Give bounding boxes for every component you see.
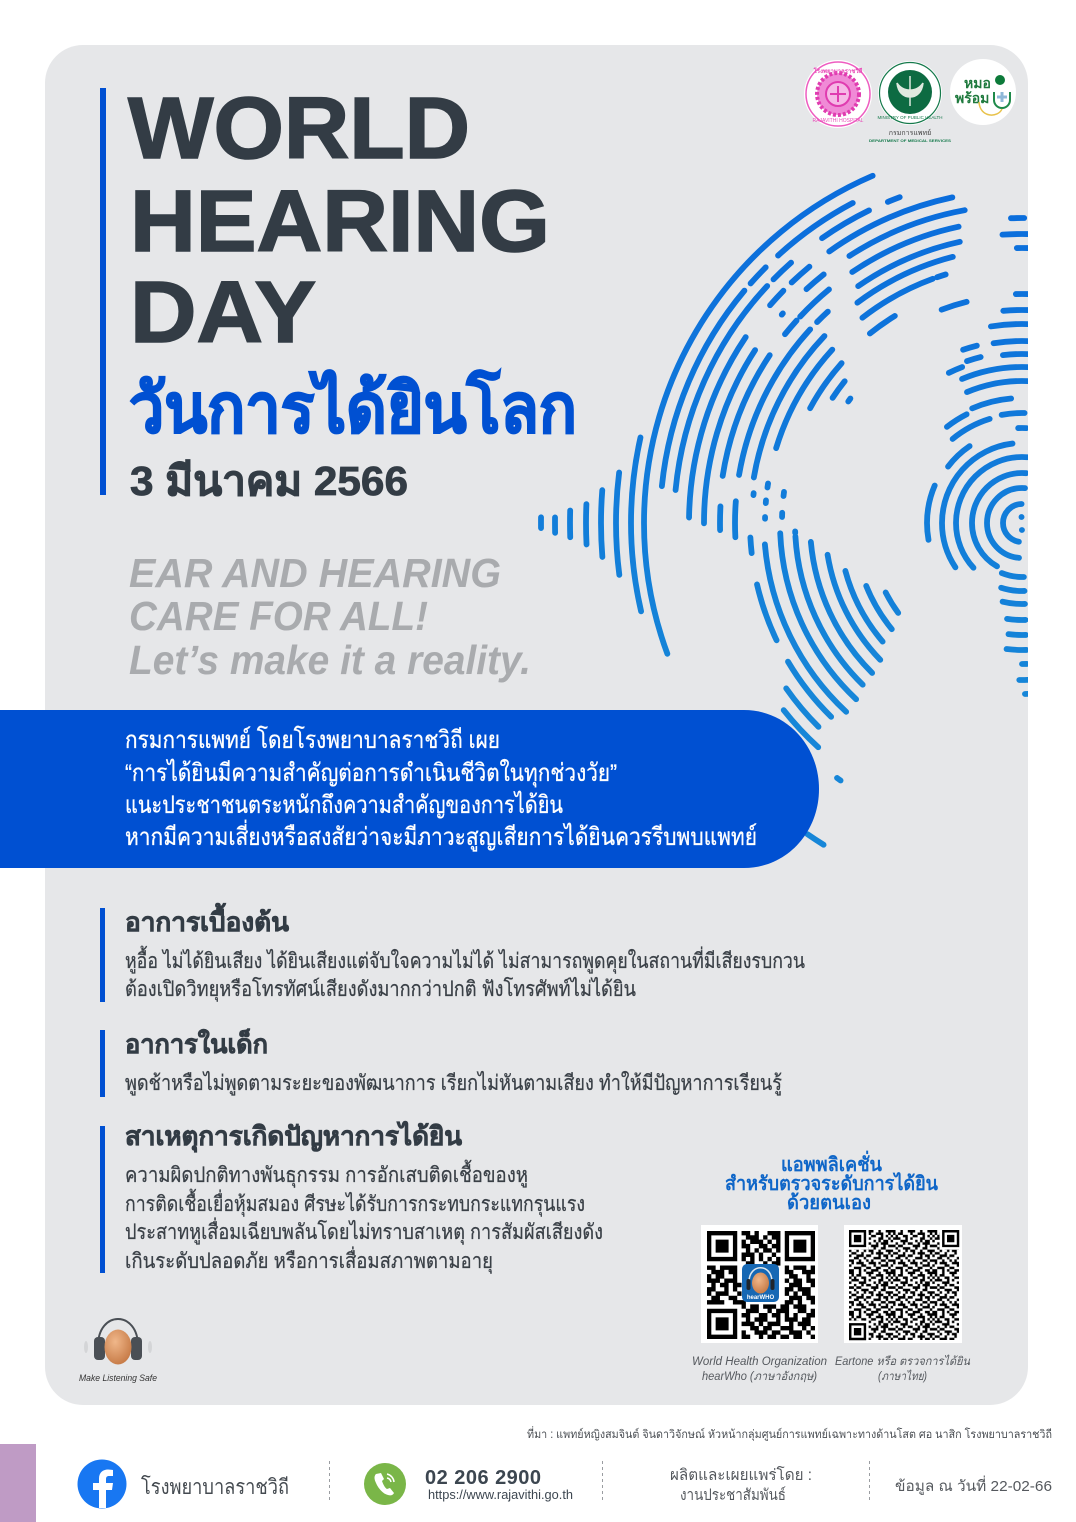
logo: Rajavithi Hospital <box>804 60 872 128</box>
title: DAY <box>130 264 316 361</box>
South America arcs <box>754 530 902 848</box>
banner: key message: แนะประชาชนตระหนักถึงความสำคัญของการได้ยิน <box>125 791 563 819</box>
title: WORLD <box>128 80 470 177</box>
date: 3 มีนาคม 2566 <box>130 458 408 504</box>
source credit: ที่มา : แพทย์หญิงสมจินต์ จินดาวิจักษณ์ หัวหน้ากลุ่มศูนย์การแพทย์เฉพาะทางด้านโสต ศอ นาสิก โรงพยาบาลราชวิถี <box>527 1426 1052 1441</box>
section: symptoms in children: พูดช้าหรือไม่พูดตามระยะของพัฒนาการ เรียกไม่หันตามเสียง ทำให้มีปัญหาการเรียนรู้ <box>125 1071 782 1096</box>
section: symptoms in children <box>100 1028 782 1097</box>
section: causes of hearing problems: สาเหตุการเกิดปัญหาการได้ยิน <box>125 1120 462 1153</box>
title accent bar <box>100 88 106 495</box>
Central America and Caribbean dashes <box>717 480 798 556</box>
heading: self-test apps: แอพพลิเคชั่น <box>781 1150 883 1176</box>
logo: Ministry of Public Health and Department of Medical Services: DEPARTMENT OF MEDICAL SERVICES <box>869 138 951 143</box>
footer: phone and website <box>364 1463 573 1505</box>
icon: egg with headphones, Make Listening Safe: Make Listening Safe <box>79 1373 157 1383</box>
footer: Facebook <box>78 1460 289 1508</box>
footer: produced by <box>670 1466 812 1504</box>
section: causes of hearing problems: การติดเชื้อเยื่อหุ้มสมอง ศีรษะได้รับการกระทบกระแทกรุนแรง <box>125 1189 585 1217</box>
QR code: Eartone <box>844 1225 962 1343</box>
icon: egg with headphones, Make Listening Safe <box>79 1319 157 1383</box>
logo: Ministry of Public Health and Department of Medical Services: MINISTRY OF PUBLIC HEALTH <box>877 115 943 120</box>
section: causes of hearing problems: ประสาทหูเสื่อมเฉียบพลันโดยไม่ทราบสาเหตุ การสัมผัสเสียงดัง <box>125 1217 603 1245</box>
theme slogan: CARE FOR ALL! <box>129 593 428 639</box>
section: early symptoms: อาการเบื้องต้น <box>125 902 289 937</box>
logo: Mor Prom: หมอ <box>964 75 991 91</box>
icon: hearWHO app logo: hearWHO <box>747 1295 774 1301</box>
captions for QR codes: World Health Organization <box>692 1356 827 1368</box>
logo: Rajavithi Hospital: โรงพยาบาลราชวิถี <box>813 67 863 75</box>
banner: key message: “การได้ยินมีความสำคัญต่อการดำเนินชีวิตในทุกช่วงวัย” <box>125 759 617 788</box>
section: early symptoms: หูอื้อ ไม่ได้ยินเสียง ได้ยินเสียงแต่จับใจความไม่ได้ ไม่สามารถพูดคุยในสถานที่มีเสียงรบกวน <box>125 946 805 974</box>
logo: Ministry of Public Health and Department of Medical Services <box>869 61 951 143</box>
footer: produced by: งานประชาสัมพันธ์ <box>680 1486 786 1504</box>
QR code: hearWHO <box>701 1225 818 1343</box>
captions for QR codes: hearWho (ภาษาอังกฤษ) <box>702 1370 817 1383</box>
banner: key message: หากมีความเสี่ยงหรือสงสัยว่าจะมีภาวะสูญเสียการได้ยินควรรีบพบแพทย์ <box>125 819 757 852</box>
captions for QR codes: (ภาษาไทย) <box>878 1369 927 1383</box>
heading: self-test apps: สำหรับตรวจระดับการได้ยิน <box>725 1172 939 1195</box>
banner: key message <box>0 710 819 868</box>
section: causes of hearing problems <box>100 1120 603 1274</box>
icon: Facebook <box>78 1460 126 1508</box>
illustration: world map of concentric blue sound-wave arcs <box>538 172 1028 848</box>
title: HEARING <box>130 173 550 270</box>
section: early symptoms <box>100 902 805 1002</box>
logo: Mor Prom: พร้อม <box>955 90 989 106</box>
theme slogan <box>129 550 531 683</box>
section: symptoms in children: อาการในเด็ก <box>125 1028 268 1059</box>
section: early symptoms: ต้องเปิดวิทยุหรือโทรทัศน์เสียงดังมากกว่าปกติ ฟังโทรศัพท์ไม่ได้ยิน <box>125 977 636 1002</box>
section: causes of hearing problems: ความผิดปกติทางพันธุกรรม การอักเสบติดเชื้อของหู <box>125 1160 528 1188</box>
Europe and Africa arcs with fingerprint rings <box>924 215 1028 697</box>
logo: Ministry of Public Health and Department of Medical Services: กรมการแพทย์ <box>889 129 931 137</box>
icon: phone <box>364 1463 406 1505</box>
purple footer tab <box>0 1444 36 1522</box>
theme slogan: EAR AND HEARING <box>129 550 501 596</box>
Thai title: วันการได้ยินโลก <box>129 369 577 447</box>
footer: Facebook: โรงพยาบาลราชวิถี <box>141 1475 289 1499</box>
section: causes of hearing problems: เกินระดับปลอดภัย หรือการเสื่อมสภาพตามอายุ <box>125 1246 493 1274</box>
captions for QR codes: Eartone หรือ ตรวจการได้ยิน <box>835 1354 971 1368</box>
captions for QR codes <box>692 1354 971 1383</box>
footer: phone and website: https://www.rajavithi.go.th <box>428 1488 573 1502</box>
heading: self-test apps: ด้วยตนเอง <box>787 1192 871 1214</box>
banner: key message: กรมการแพทย์ โดยโรงพยาบาลราชวิถี เผย <box>125 726 500 754</box>
logo: Mor Prom <box>950 59 1016 125</box>
North America arcs <box>641 172 970 657</box>
footer: produced by: ผลิตและเผยแพร่โดย : <box>670 1466 812 1484</box>
logo: Rajavithi Hospital: RAJAVITHI HOSPITAL <box>813 118 864 124</box>
footer: phone and website: 02 206 2900 <box>425 1467 541 1489</box>
left sound-wave fan <box>538 434 644 614</box>
theme slogan: Let’s make it a reality. <box>129 637 531 683</box>
footer: data date: ข้อมูล ณ วันที่ 22-02-66 <box>895 1475 1052 1495</box>
title <box>128 80 550 361</box>
heading: self-test apps <box>725 1150 939 1214</box>
